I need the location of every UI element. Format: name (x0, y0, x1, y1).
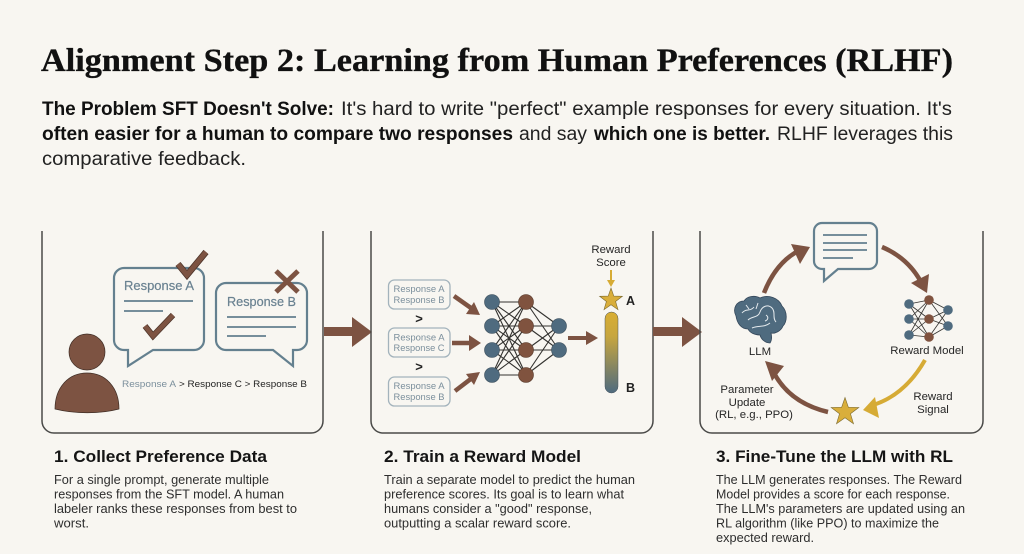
icon: reward model network (904, 295, 953, 342)
caption: step 1: labeler ranks these responses from best to (54, 502, 297, 516)
response pair boxes: > (415, 359, 423, 374)
response pair boxes: Response A (394, 284, 445, 295)
caption: step 2: outputting a scalar reward score. (384, 516, 571, 530)
response pair boxes: > (415, 311, 423, 326)
caption: step 2: Train a separate model to predict the human (384, 473, 635, 487)
icon: brain (735, 296, 786, 343)
response pair boxes: Response C (394, 343, 445, 354)
reward score scale: Reward (591, 244, 631, 256)
reward score scale: B (626, 381, 635, 395)
title: Alignment Step 2: Learning from Human Preferences (RLHF) (41, 43, 953, 79)
caption: step 3 (716, 448, 965, 545)
reward score scale (591, 244, 635, 395)
caption: step 1: responses from the SFT model. A human (54, 488, 284, 502)
panel: collect preference data (42, 231, 323, 433)
caption: step 1 (53, 448, 297, 530)
LLM label: LLM (749, 346, 771, 358)
ranking text: Response A (122, 379, 177, 390)
panel: fine-tune LLM (700, 223, 983, 433)
parameter update label (715, 384, 793, 421)
intro text block: RLHF leverages this (777, 124, 953, 145)
ranking text (122, 379, 307, 390)
response pair boxes: Response B (394, 392, 444, 403)
intro text block: It's hard to write "perfect" example responses for every situation. It's (341, 99, 952, 120)
icon: star (831, 398, 859, 424)
neural network (484, 294, 566, 382)
response B bubble: Response B (227, 294, 296, 309)
response pair boxes: Response B (394, 295, 444, 306)
response pair boxes: Response A (394, 381, 445, 392)
reward signal label: Reward (913, 391, 953, 403)
ranking text: > Response C > Response B (179, 379, 307, 390)
caption: step 3: expected reward. (716, 531, 814, 545)
response A bubble: Response A (124, 278, 194, 293)
reward signal label (913, 391, 953, 416)
intro text block: comparative feedback. (42, 149, 246, 170)
output arrow (568, 331, 598, 345)
intro text block: often easier for a human to compare two responses (42, 124, 513, 145)
caption: step 3: 3. Fine-Tune the LLM with RL (716, 448, 953, 466)
caption: step 2: 2. Train a Reward Model (384, 448, 581, 466)
caption: step 3: Model provides a score for each response. (716, 488, 950, 502)
caption: step 3: The LLM generates responses. The Reward (716, 473, 962, 487)
response B bubble (216, 271, 307, 366)
intro text block: The Problem SFT Doesn't Solve: (42, 99, 334, 120)
reward score scale: Score (596, 257, 626, 269)
caption: step 1: worst. (53, 516, 89, 530)
intro text block: which one is better. (593, 124, 770, 145)
intro text block: and say (519, 124, 588, 145)
reward score scale: A (626, 294, 635, 308)
icon: person (55, 334, 119, 413)
response A bubble (114, 252, 206, 366)
response pair boxes: Response A (394, 332, 445, 344)
arrow: panel 1 to 2 (324, 317, 372, 347)
caption: step 2 (384, 448, 635, 530)
reward signal label: Signal (917, 404, 949, 416)
caption: step 1: For a single prompt, generate multiple (54, 473, 269, 487)
input arrows (452, 296, 481, 391)
cycle arrows (764, 244, 929, 418)
parameter update label: (RL, e.g., PPO) (715, 409, 793, 421)
caption: step 3: The LLM's parameters are updated using an (716, 502, 965, 516)
reward model label: Reward Model (890, 345, 964, 357)
arrow: panel 2 to 3 (653, 317, 702, 347)
parameter update label: Update (729, 397, 765, 409)
caption: step 2: preference scores. Its goal is to learn what (384, 488, 624, 502)
response bubble (814, 223, 877, 281)
parameter update label: Parameter (720, 384, 774, 396)
caption: step 1: 1. Collect Preference Data (54, 448, 268, 466)
caption: step 2: humans consider a "good" response, (384, 502, 592, 516)
panel: train reward model (371, 231, 653, 433)
caption: step 3: RL algorithm (like PPO) to maximize the (716, 516, 939, 530)
response pair boxes (388, 280, 450, 406)
intro text block (42, 99, 953, 170)
